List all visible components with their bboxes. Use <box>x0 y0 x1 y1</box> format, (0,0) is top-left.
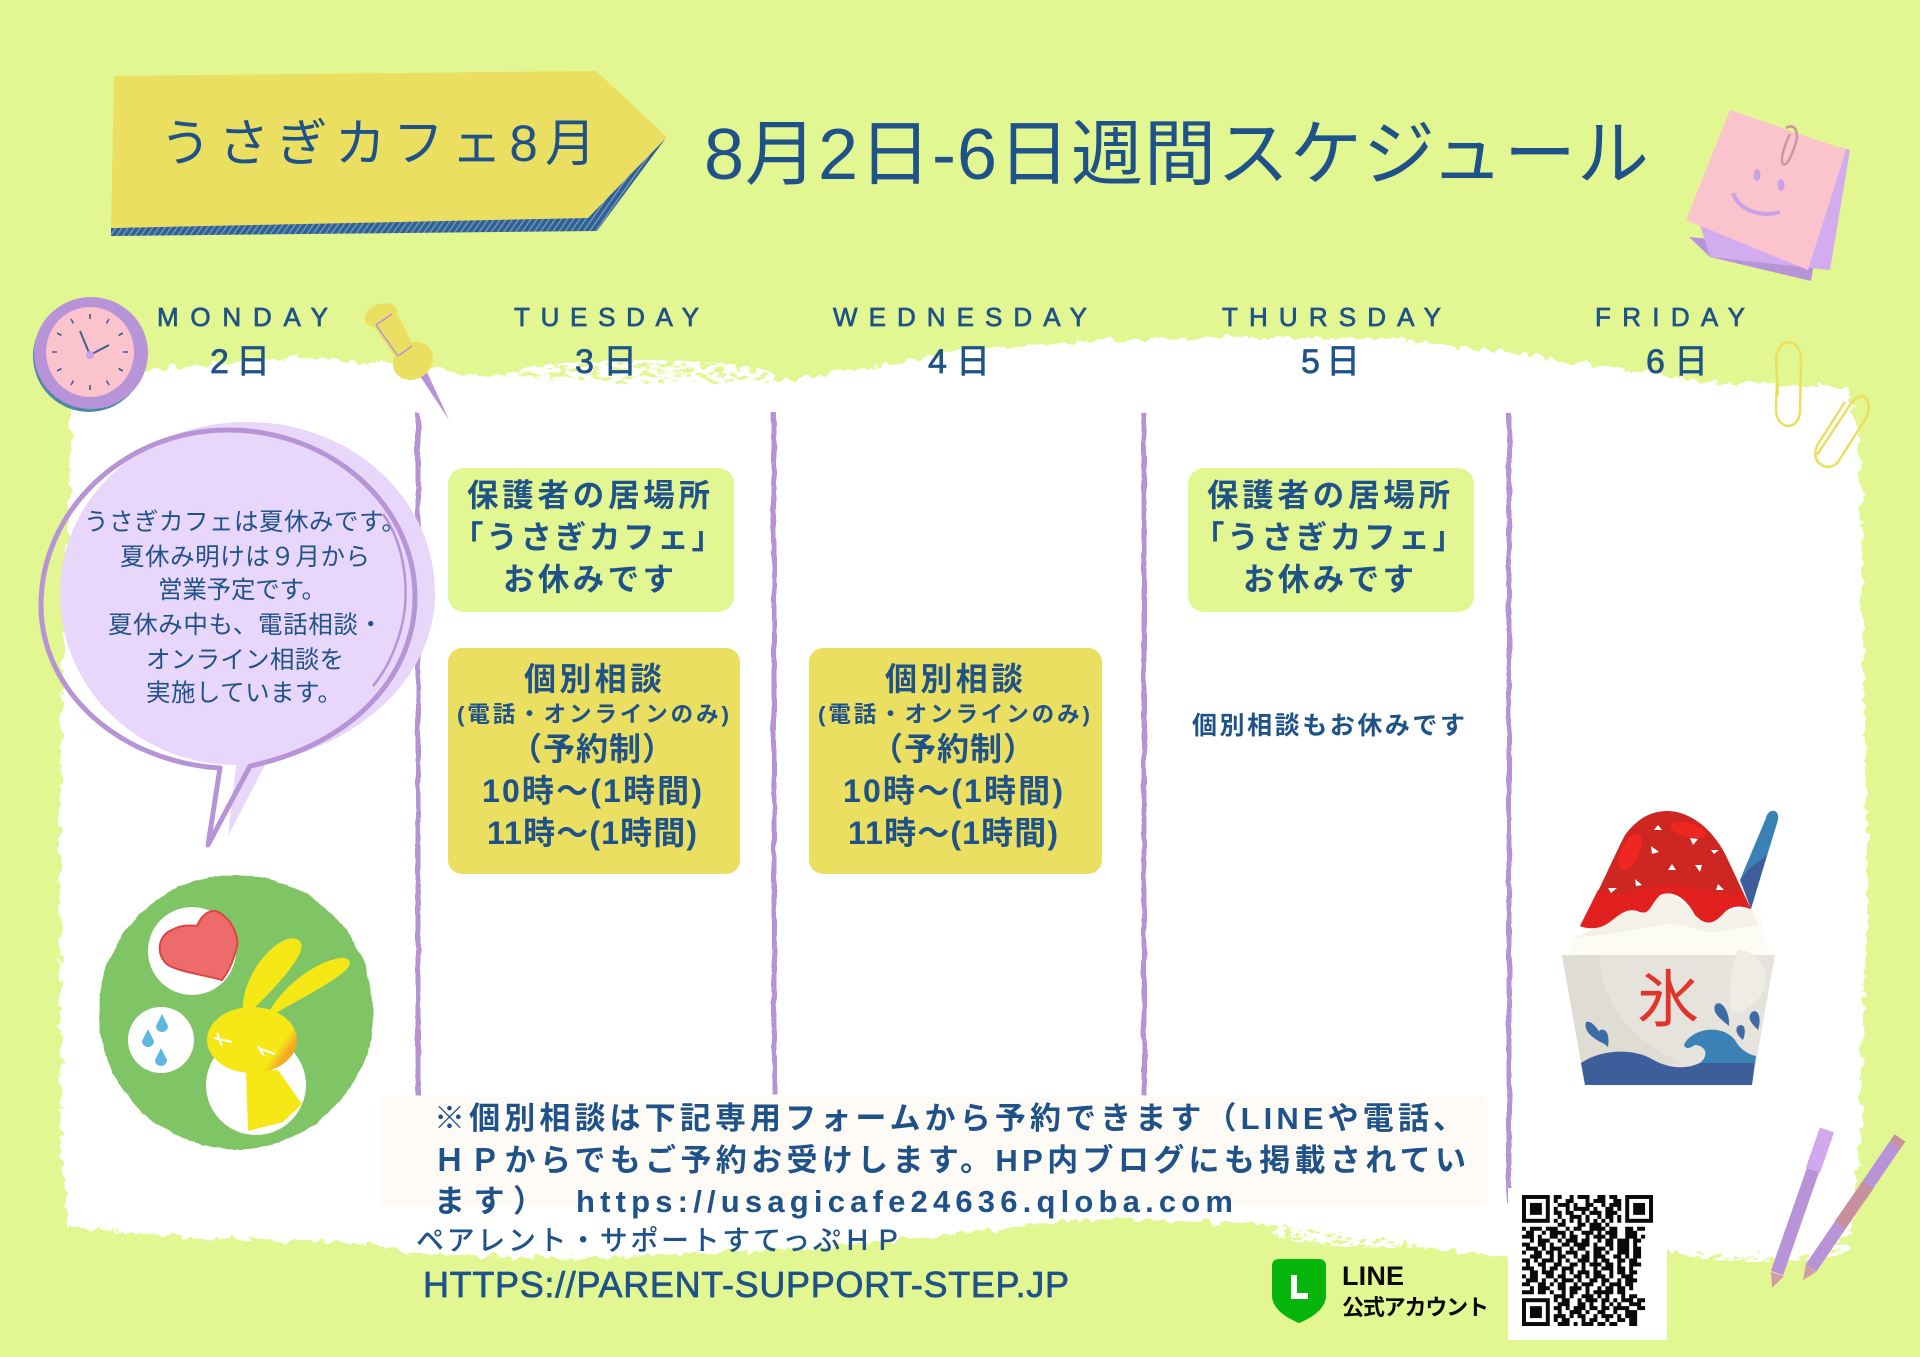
text: Thursday note: 個別相談もお休みです <box>1192 712 1465 740</box>
day headers <box>157 302 1745 332</box>
panel: Wednesday consultation card: 個別相談 <box>885 661 1023 697</box>
day headers: WEDNESDAY <box>833 302 1087 332</box>
panel: booking note <box>380 1097 1486 1219</box>
panel: Tuesday closed card: お休みです <box>503 561 674 597</box>
icon: push pin <box>361 299 449 420</box>
icon: clock <box>33 297 148 412</box>
panel: Tuesday closed card: 保護者の居場所 <box>467 477 710 513</box>
panel: Thursday closed card: お休みです <box>1243 561 1414 597</box>
panel: Tuesday consultation card: (電話・オンラインのみ) <box>457 702 729 727</box>
day headers: TUESDAY <box>514 302 699 332</box>
dates: 6日 <box>1646 343 1708 381</box>
dates: 4日 <box>928 343 990 381</box>
text: bubble message: オンライン相談を <box>146 646 344 674</box>
day headers: THURSDAY <box>1222 302 1441 332</box>
panel: Wednesday consultation card: 10時～(1時間) <box>843 773 1063 809</box>
panel: Tuesday consultation card: 10時～(1時間) <box>482 773 702 809</box>
panel: booking note: ※個別相談は下記専用フォームから予約できます（LINEや電話、 <box>434 1101 1464 1136</box>
icon: LINE official account: 公式アカウント <box>1342 1295 1489 1320</box>
dates: 3日 <box>575 343 637 381</box>
icon: sticky notes <box>1686 110 1850 281</box>
panel: Tuesday closed card: 「うさぎカフェ」 <box>452 519 723 555</box>
title: 8月2日-6日週間スケジュール <box>704 115 1649 195</box>
icon: shaved ice <box>1562 811 1778 1085</box>
panel: Tuesday closed card <box>448 468 734 612</box>
panel: Thursday closed card: 「うさぎカフェ」 <box>1193 519 1464 555</box>
panel: Tuesday consultation card <box>448 648 740 874</box>
text: bubble message: うさぎカフェは夏休みです。 <box>84 508 406 536</box>
panel: speech bubble <box>41 422 435 845</box>
torn white paper panel <box>60 337 1868 1258</box>
panel: Wednesday consultation card: (電話・オンラインのみ) <box>818 702 1090 727</box>
icon: pens <box>1771 1130 1900 1288</box>
text: parent support url: HTTPS://PARENT-SUPPORT-STEP.JP <box>423 1264 1069 1305</box>
icon: LINE official account: LINE <box>1342 1261 1404 1291</box>
icon: LINE official account <box>1272 1259 1489 1323</box>
icon: paper clips <box>1776 342 1869 467</box>
day headers: MONDAY <box>157 302 328 332</box>
panel: Tuesday consultation card: （予約制） <box>510 731 674 767</box>
text: bubble message <box>84 508 406 707</box>
panel: booking note: ます） <box>434 1184 544 1219</box>
title banner arrow: うさぎカフェ8月 <box>160 115 596 172</box>
panel: Wednesday consultation card: （予約制） <box>871 731 1035 767</box>
panel: booking note: ＨＰからでもご予約お受けします。HP内ブログにも掲載されてい <box>434 1143 1466 1178</box>
text: parent support label: ペアレント・サポートすてっぷＨＰ <box>416 1225 902 1256</box>
title banner arrow <box>111 71 667 236</box>
panel: Wednesday consultation card <box>809 648 1102 874</box>
day headers: FRIDAY <box>1595 302 1745 332</box>
text: bubble message: 営業予定です。 <box>158 576 326 604</box>
panel: Tuesday consultation card: 11時～(1時間) <box>487 815 697 851</box>
panel: booking note: https://usagicafe24636.qloba.com <box>576 1184 1233 1219</box>
dates: 5日 <box>1301 343 1360 381</box>
column dividers <box>418 413 1509 1203</box>
icon: shaved ice: 氷 <box>1637 966 1699 1035</box>
text: bubble message: 実施しています。 <box>146 679 342 707</box>
panel: Thursday closed card <box>1188 468 1474 612</box>
QR code <box>1508 1188 1667 1340</box>
icon: rabbit in green circle <box>99 875 373 1149</box>
dates: 2日 <box>210 343 270 381</box>
panel: Wednesday consultation card: 11時～(1時間) <box>848 815 1058 851</box>
panel: Thursday closed card: 保護者の居場所 <box>1207 477 1450 513</box>
dates <box>210 343 1708 381</box>
text: bubble message: 夏休み中も、電話相談・ <box>108 611 383 639</box>
text: bubble message: 夏休み明けは９月から <box>120 543 370 571</box>
panel: Tuesday consultation card: 個別相談 <box>524 661 662 697</box>
